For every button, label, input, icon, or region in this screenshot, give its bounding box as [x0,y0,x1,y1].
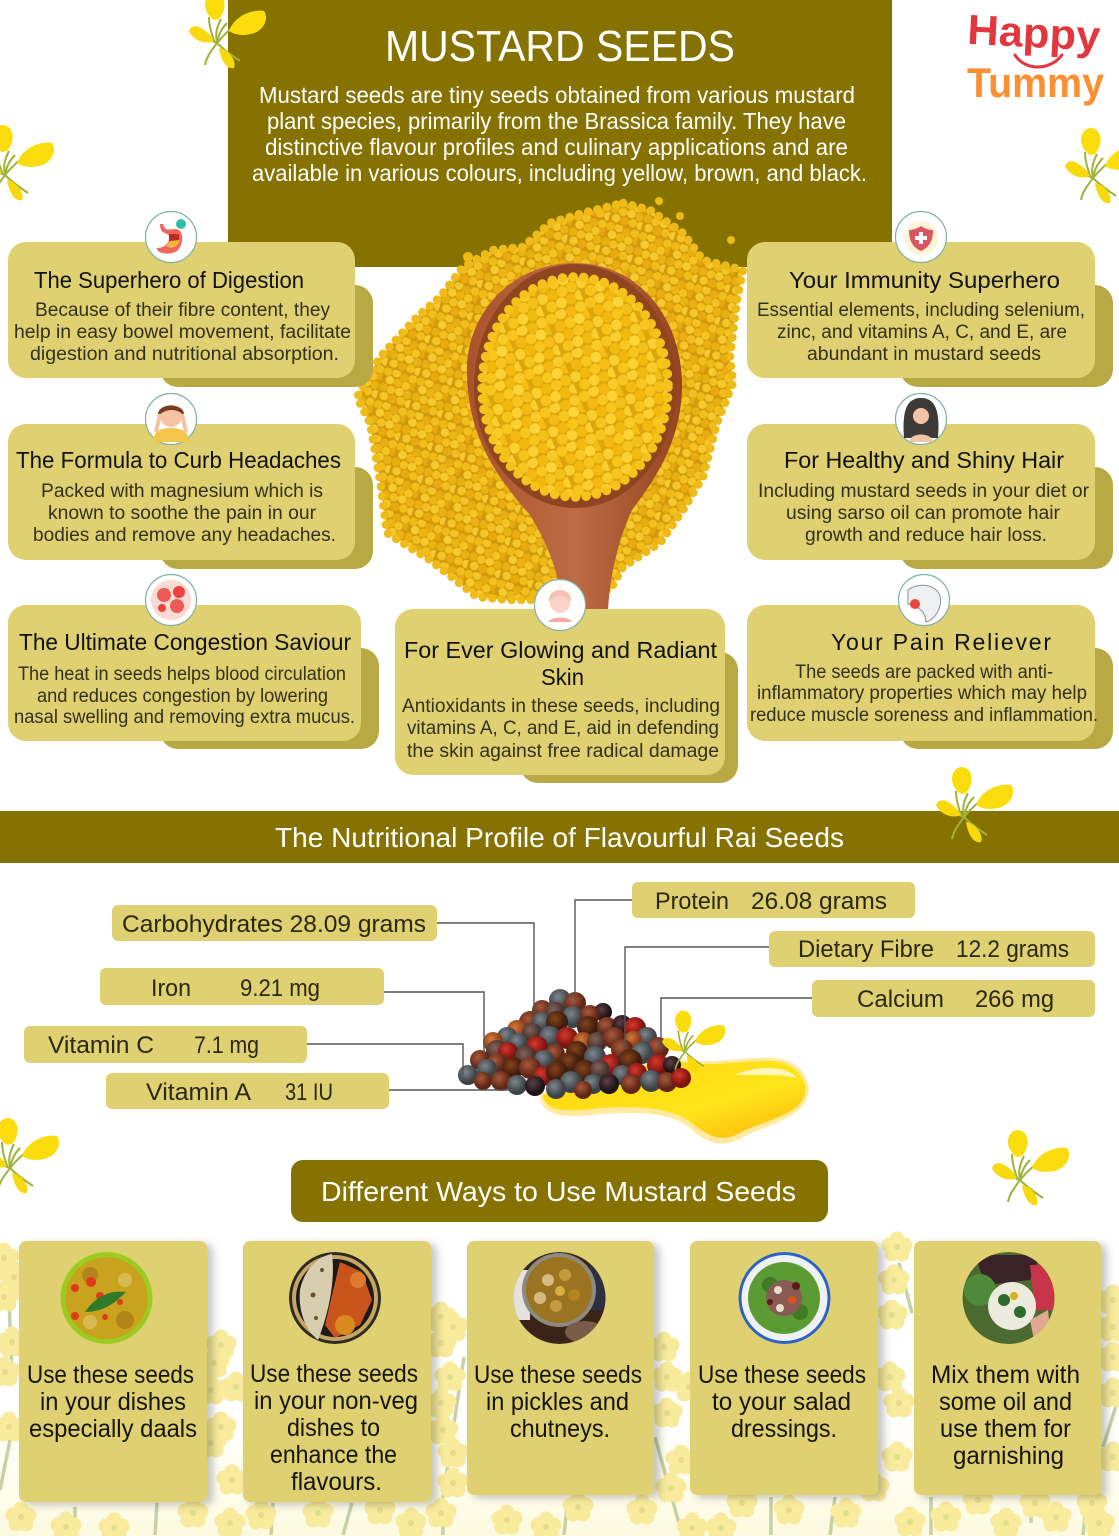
text: flavours. [291,1468,382,1496]
body text: and reduces congestion by lowering [37,686,328,707]
body text: the skin against free radical damage [407,741,719,762]
body text: Because of their fibre content, they [35,300,330,321]
text: dishes to [287,1414,380,1442]
section band: nutritional profile: The Nutritional Profile of Flavourful Rai Seeds [275,822,844,853]
text: in pickles and [486,1388,629,1416]
text: in your dishes [40,1388,186,1416]
text: Mix them with [931,1361,1080,1389]
stray seeds [463,197,735,262]
connector lines [307,900,812,1090]
seeds in spoon [482,277,668,497]
heading: The Formula to Curb Headaches [16,447,341,473]
heading: For Healthy and Shiny Hair [784,447,1064,473]
body text: Packed with magnesium which is [41,481,323,502]
text [250,1360,418,1496]
intro paragraph: available in various colours, including yellow, brown, and black. [252,160,867,186]
logo: Happy Tummy: Tummy [967,59,1105,106]
heading: Your Immunity Superhero [789,267,1060,293]
label: iron: Iron [151,975,191,1002]
label: protein: 26.08 grams [751,888,887,915]
label: dietary fibre: Dietary Fibre [798,936,934,963]
text: some oil and [939,1388,1072,1416]
label: dietary fibre [769,931,1095,967]
icon: glowing face [534,580,586,630]
text [698,1361,866,1443]
flower: band [936,767,1013,842]
text [931,1361,1080,1470]
loose seed pile [357,203,743,600]
oil puddle [540,1058,809,1144]
image: daal bowl [60,1252,152,1344]
heading [404,637,718,690]
icon: stomach [146,212,196,262]
flower: lower left [0,1118,59,1193]
intro paragraph: plant species, primarily from the Brassica family. They have [267,108,846,134]
panel: pain [747,574,1113,749]
icon: sore shoulder [898,574,950,626]
body text [14,300,351,365]
intro paragraph: Mustard seeds are tiny seeds obtained from various mustard [259,82,855,108]
label: calcium [812,980,1095,1017]
header panel [228,0,892,267]
text: garnishing [953,1442,1064,1470]
heading: different ways [291,1160,828,1222]
image: curry and naan [289,1252,381,1344]
text: dressings. [731,1415,837,1443]
label: carbohydrates: Carbohydrates 28.09 grams [122,911,426,938]
label: calcium: 266 mg [975,986,1054,1013]
body text: help in easy bowel movement, facilitate [14,322,351,343]
card: salad [690,1241,878,1495]
body text: zinc, and vitamins A, C, and E, are [777,322,1067,343]
text: Use these seeds [698,1361,866,1389]
body text: Including mustard seeds in your diet or [758,481,1090,502]
panel: congestion [8,574,379,749]
card: daals [19,1241,207,1502]
decorative meadow background [0,1232,1119,1536]
panel: digestion [8,212,373,387]
text: Use these seeds [474,1361,642,1389]
icon: woman with headache [146,394,196,444]
body text [758,481,1090,546]
text: especially daals [29,1415,197,1443]
heading: different ways: Different Ways to Use Mustard Seeds [321,1176,796,1207]
label: iron: 9.21 mg [240,975,320,1002]
label: vitamin A [106,1073,389,1109]
card: non-veg [243,1241,431,1502]
text: to your salad [712,1388,851,1416]
body text: Essential elements, including selenium, [757,300,1085,321]
body text: digestion and nutritional absorption. [30,344,339,365]
icon: shield [896,212,946,262]
icon: woman with long hair [896,394,946,444]
label: dietary fibre: 12.2 grams [956,936,1069,963]
flower: lower right [992,1130,1069,1205]
body text: Antioxidants in these seeds, including [402,696,720,717]
label: vitamin A: Vitamin A [146,1079,251,1106]
body text [757,300,1085,365]
label: vitamin C [24,1026,307,1063]
text: in your non-veg [254,1387,418,1415]
body text: The seeds are packed with anti- [795,662,1053,683]
flower: left [0,125,54,200]
text: chutneys. [510,1415,610,1443]
text [474,1361,642,1443]
heading: For Ever Glowing and Radiant [404,637,718,663]
label: protein [632,882,915,918]
body text: vitamins A, C, and E, aid in defending [407,718,719,739]
image: pickle bowl [513,1252,606,1344]
image: greens and radishes [962,1252,1060,1345]
logo: Happy Tummy: Happy [966,6,1102,60]
label: protein: Protein [655,888,729,915]
logo: Happy Tummy [966,6,1105,106]
body text: known to soothe the pain in our [48,503,317,524]
seed heap [458,989,691,1099]
section band: nutritional profile [0,811,1119,863]
panel: headaches [8,394,373,569]
label: calcium: Calcium [857,986,944,1013]
text: Use these seeds [250,1360,418,1388]
flower: on oil [662,1011,725,1072]
heading: The Ultimate Congestion Saviour [19,629,351,655]
image: salad plate [738,1252,830,1344]
text: enhance the [270,1441,397,1469]
label: carbohydrates [112,905,437,941]
body text [750,662,1098,726]
body text: bodies and remove any headaches. [33,525,336,546]
panel: hair [747,394,1113,569]
heading: Your Pain Reliever [831,629,1051,655]
heading: Skin [541,664,584,690]
body text: abundant in mustard seeds [807,344,1041,365]
body text: The heat in seeds helps blood circulation [18,664,346,685]
intro paragraph [252,82,867,186]
body text: growth and reduce hair loss. [805,525,1047,546]
label: iron [100,968,384,1005]
body text: inflammatory properties which may help [757,683,1087,704]
flower: right [1065,128,1119,203]
label: vitamin C: 7.1 mg [194,1032,259,1059]
text: use them for [940,1415,1071,1443]
body text: nasal swelling and removing extra mucus. [14,707,355,728]
spoon [467,263,682,610]
heading: The Superhero of Digestion [34,267,304,293]
body text: reduce muscle soreness and inflammation. [750,705,1098,726]
icon: blood cells [146,574,196,626]
body text [402,696,720,762]
card: garnishing [914,1241,1101,1495]
body text: using sarso oil can promote hair [786,503,1061,524]
panel: skin [395,580,738,783]
title: MUSTARD SEEDS [385,22,735,71]
label: vitamin C: Vitamin C [48,1032,154,1059]
spoon bowl [474,264,676,508]
intro paragraph: distinctive flavour profiles and culinary applications and are [265,134,848,160]
body text [14,664,355,728]
body text [33,481,336,546]
flower: top left [189,0,266,68]
panel: immunity [747,212,1113,387]
text [27,1361,197,1443]
text: Use these seeds [27,1361,194,1389]
card: pickles [467,1241,654,1495]
mustard seeds pile with wooden spoon [357,197,743,610]
illustration: oil and rai seeds [458,989,809,1144]
label: vitamin A: 31 IU [285,1079,333,1106]
